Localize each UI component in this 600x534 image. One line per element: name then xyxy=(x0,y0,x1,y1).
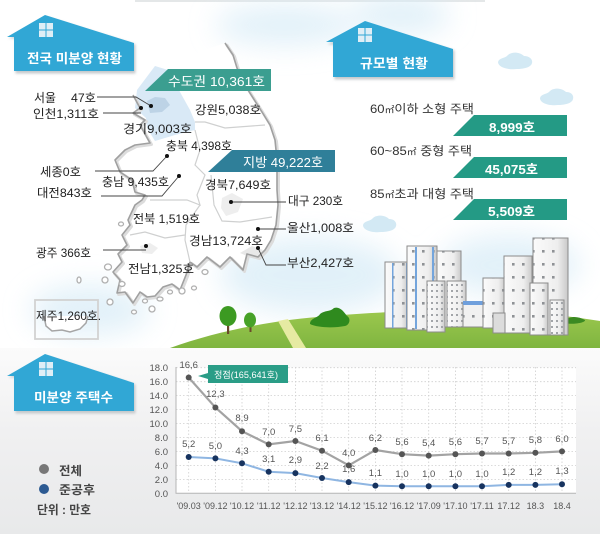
data labels: total: 12,3 xyxy=(206,389,225,400)
banner: 수도권: 수도권 10,361호 xyxy=(168,74,265,89)
banner: 지방 xyxy=(208,150,335,172)
regional labels: 경기9,003호 xyxy=(123,122,192,136)
x axis labels: '09.12 xyxy=(203,501,228,511)
bar: medium xyxy=(453,157,567,178)
data labels: after completion: 2,2 xyxy=(315,461,329,472)
legend: after completion: 준공후 xyxy=(59,482,95,497)
coastline xyxy=(113,43,278,303)
size category list: 60㎡이하 소형 주택 xyxy=(370,102,474,116)
data labels: total: 5,7 xyxy=(502,436,515,447)
regional labels: 충남 9,435호 xyxy=(102,175,169,189)
data labels: after completion: 5,2 xyxy=(182,439,195,450)
data labels: after completion: 1,0 xyxy=(475,469,489,480)
Daegu xyxy=(221,193,243,216)
regional labels: 전남1,325호 xyxy=(128,262,194,276)
data labels: total: 5,6 xyxy=(449,437,462,448)
series: after completion xyxy=(186,454,565,489)
regional labels: 강원5,038호 xyxy=(195,103,261,117)
bush xyxy=(310,308,349,327)
legend xyxy=(37,464,95,517)
clouds xyxy=(363,53,573,232)
regional labels: 47호 xyxy=(71,91,96,105)
regional labels: 경남13,724호 xyxy=(189,234,263,248)
x axis labels: '10.12 xyxy=(230,501,254,511)
regional labels: 울산1,008호 xyxy=(287,221,354,235)
banner: 수도권 xyxy=(145,69,271,91)
data labels: after completion: 3,1 xyxy=(262,454,275,465)
callout: peak: 정점(165,641호) xyxy=(214,369,278,380)
house badge: 전국 미분양 현황 xyxy=(7,15,136,74)
data labels: total: 6,0 xyxy=(555,434,569,445)
leader lines and dots xyxy=(95,97,286,265)
data labels: total: 5,8 xyxy=(529,435,542,446)
regional labels: 경북7,649호 xyxy=(205,178,271,192)
house badge: 규모별 현황 xyxy=(326,21,454,80)
y axis labels: 8.0 xyxy=(155,433,168,444)
x axis labels: 18.3 xyxy=(527,501,544,511)
data labels: after completion: 2,9 xyxy=(289,455,302,466)
data labels: total: 6,2 xyxy=(369,433,382,444)
regional labels: 광주 366호 xyxy=(36,246,91,260)
house badge: 규모별 현황: 규모별 현황 xyxy=(360,56,428,71)
tree small xyxy=(244,312,256,332)
y axis labels xyxy=(150,363,168,500)
map of South Korea xyxy=(35,43,280,339)
Gwangju xyxy=(140,243,158,254)
window icon xyxy=(358,28,372,42)
data labels: total: 6,1 xyxy=(315,433,329,444)
x axis labels: '17.09 xyxy=(417,501,441,511)
regional labels: 대전843호 xyxy=(37,186,92,200)
y axis labels: 16.0 xyxy=(150,377,168,388)
background sky wash xyxy=(30,0,580,335)
data labels: after completion: 1,3 xyxy=(555,466,569,477)
x axis labels: 18.4 xyxy=(553,501,571,511)
size category list xyxy=(370,102,567,220)
data labels: after completion: 1,0 xyxy=(449,469,462,480)
x axis labels: '12.12 xyxy=(283,501,308,511)
x axis labels: '17.10 xyxy=(443,501,468,511)
x axis labels: 17.12 xyxy=(497,501,520,511)
y axis labels: 12.0 xyxy=(150,405,168,416)
x axis labels: '17.11 xyxy=(470,501,494,511)
house badge: 미분양 주택수 xyxy=(7,354,136,414)
Seoul xyxy=(147,97,170,113)
y axis labels: 0.0 xyxy=(155,489,168,500)
size category list: 60~85 ㎡ 중형 주택 xyxy=(370,144,472,158)
data labels: total: 16,6 xyxy=(179,360,198,371)
bar: small xyxy=(453,115,567,136)
coastline shadow xyxy=(114,44,280,304)
bottom chart panel background xyxy=(0,348,600,534)
data labels: total: 7,5 xyxy=(289,424,302,435)
regional labels: 세종0호 xyxy=(40,165,81,179)
data labels: after completion: 1,0 xyxy=(422,469,435,480)
x axis labels: '09.03 xyxy=(177,501,201,511)
Jeju inset box and island xyxy=(35,300,98,339)
banner: 지방: 지방 49,222호 xyxy=(243,155,323,170)
data labels: after completion: 1,0 xyxy=(395,469,409,480)
islands xyxy=(77,222,208,314)
regional labels: 서울 xyxy=(34,91,56,105)
data labels: after completion: 1,1 xyxy=(369,468,382,479)
x axis labels: '13.12 xyxy=(310,501,334,511)
data labels: after completion: 1,2 xyxy=(502,467,515,478)
x axis labels: '15.12 xyxy=(363,501,388,511)
y axis labels: 4.0 xyxy=(155,461,168,472)
data labels: total: 8,9 xyxy=(235,413,249,424)
regional labels: 대구 230호 xyxy=(288,194,343,208)
data labels: total: 5,6 xyxy=(395,437,409,448)
data labels: after completion: 5,0 xyxy=(209,441,222,452)
size category list: 85㎡초과 대형 주택 xyxy=(370,187,474,201)
x axis labels xyxy=(177,501,571,511)
Busan xyxy=(240,246,263,257)
x axis labels: '11.12 xyxy=(257,501,280,511)
data labels: after completion: 1,2 xyxy=(529,467,542,478)
legend: 단위 : 만호 xyxy=(37,503,91,517)
series: total xyxy=(186,374,565,468)
regional labels: 부산2,427호 xyxy=(287,256,354,270)
bar: medium: 45,075호 xyxy=(485,162,538,177)
data labels: total: 5,7 xyxy=(475,436,489,447)
path through the hill xyxy=(278,319,306,348)
window icon xyxy=(39,362,53,376)
landscape: hill, trees, bush, path xyxy=(170,306,600,348)
legend: total: 전체 xyxy=(59,464,82,478)
apartment buildings xyxy=(385,238,568,335)
x axis labels: '14.12 xyxy=(337,501,361,511)
bar: large: 5,509호 xyxy=(488,204,535,219)
regional labels xyxy=(33,91,354,323)
tree large xyxy=(220,306,236,334)
y axis labels: 18.0 xyxy=(150,363,168,374)
Gyeonggi metropolitan area xyxy=(135,66,195,141)
regional labels: 제주1,260호. xyxy=(36,309,101,323)
data labels: total: 5,4 xyxy=(422,438,435,449)
line chart xyxy=(150,360,576,511)
map land fill xyxy=(113,43,278,303)
bar: small: 8,999호 xyxy=(489,120,535,135)
data labels: after completion: 1,6 xyxy=(342,464,355,475)
y axis labels: 6.0 xyxy=(155,447,168,458)
house badge: 전국 미분양 현황: 전국 미분양 현황 xyxy=(27,51,122,66)
y axis labels: 10.0 xyxy=(150,419,168,430)
callout: peak xyxy=(198,365,288,383)
house badge: 미분양 주택수: 미분양 주택수 xyxy=(34,390,113,405)
data labels: after completion: 4,3 xyxy=(235,446,249,457)
data labels: after completion xyxy=(182,439,569,480)
y axis labels: 2.0 xyxy=(155,475,168,486)
data labels: total: 4,0 xyxy=(342,448,355,459)
y axis labels: 14.0 xyxy=(150,391,168,402)
regional labels: 충북 4,398호 xyxy=(166,139,232,153)
regional labels: 전북 1,519호 xyxy=(133,212,200,226)
x axis labels: '16.12 xyxy=(390,501,414,511)
window icon xyxy=(39,23,53,37)
regional labels: 인천1,311호 xyxy=(33,106,99,121)
data labels: total: 7,0 xyxy=(262,427,275,438)
province borders xyxy=(130,122,272,262)
data labels: total xyxy=(179,360,569,459)
bar: large xyxy=(453,199,567,220)
